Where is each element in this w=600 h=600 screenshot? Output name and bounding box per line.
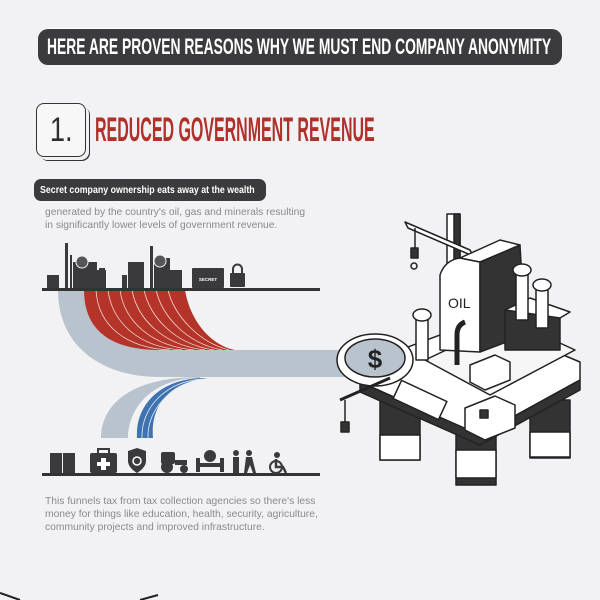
legs — [380, 400, 570, 485]
oil rig illustration — [336, 213, 581, 486]
outro text: This funnels tax from tax collection agencies so there's less money for things like education, health, security, agriculture, community projects and improved infrastructure. — [45, 496, 318, 533]
bottom partial shapes — [0, 592, 158, 600]
OIL tower — [440, 240, 525, 365]
number box — [36, 103, 86, 157]
flow: blue band — [137, 378, 208, 438]
coin — [337, 334, 413, 432]
number box: 1. — [50, 111, 72, 149]
icons: factories, secret folder, lock — [47, 243, 245, 288]
section title: REDUCED GOVERNMENT REVENUE — [95, 111, 375, 149]
flow: gray pipe — [58, 290, 345, 438]
top shelf line — [42, 288, 320, 291]
bottom shelf line — [42, 473, 320, 476]
header bar — [38, 29, 562, 65]
OIL tower: OIL — [448, 295, 471, 311]
crane — [405, 214, 473, 294]
deck — [360, 320, 580, 445]
icons: public services — [50, 448, 286, 473]
header bar: HERE ARE PROVEN REASONS WHY WE MUST END COMPANY ANONYMITY — [47, 34, 551, 59]
subtitle bar: Secret company ownership eats away at the wealth — [40, 184, 255, 196]
intro text: generated by the country's oil, gas and minerals resulting in significantly lower levels of government revenue. — [45, 207, 305, 231]
icons: factories, secret folder, lock: SECRET — [199, 277, 217, 282]
subtitle bar — [34, 179, 266, 201]
flow: red band — [84, 290, 235, 350]
coin: $ — [368, 344, 383, 374]
pipes and blocks — [413, 264, 570, 440]
